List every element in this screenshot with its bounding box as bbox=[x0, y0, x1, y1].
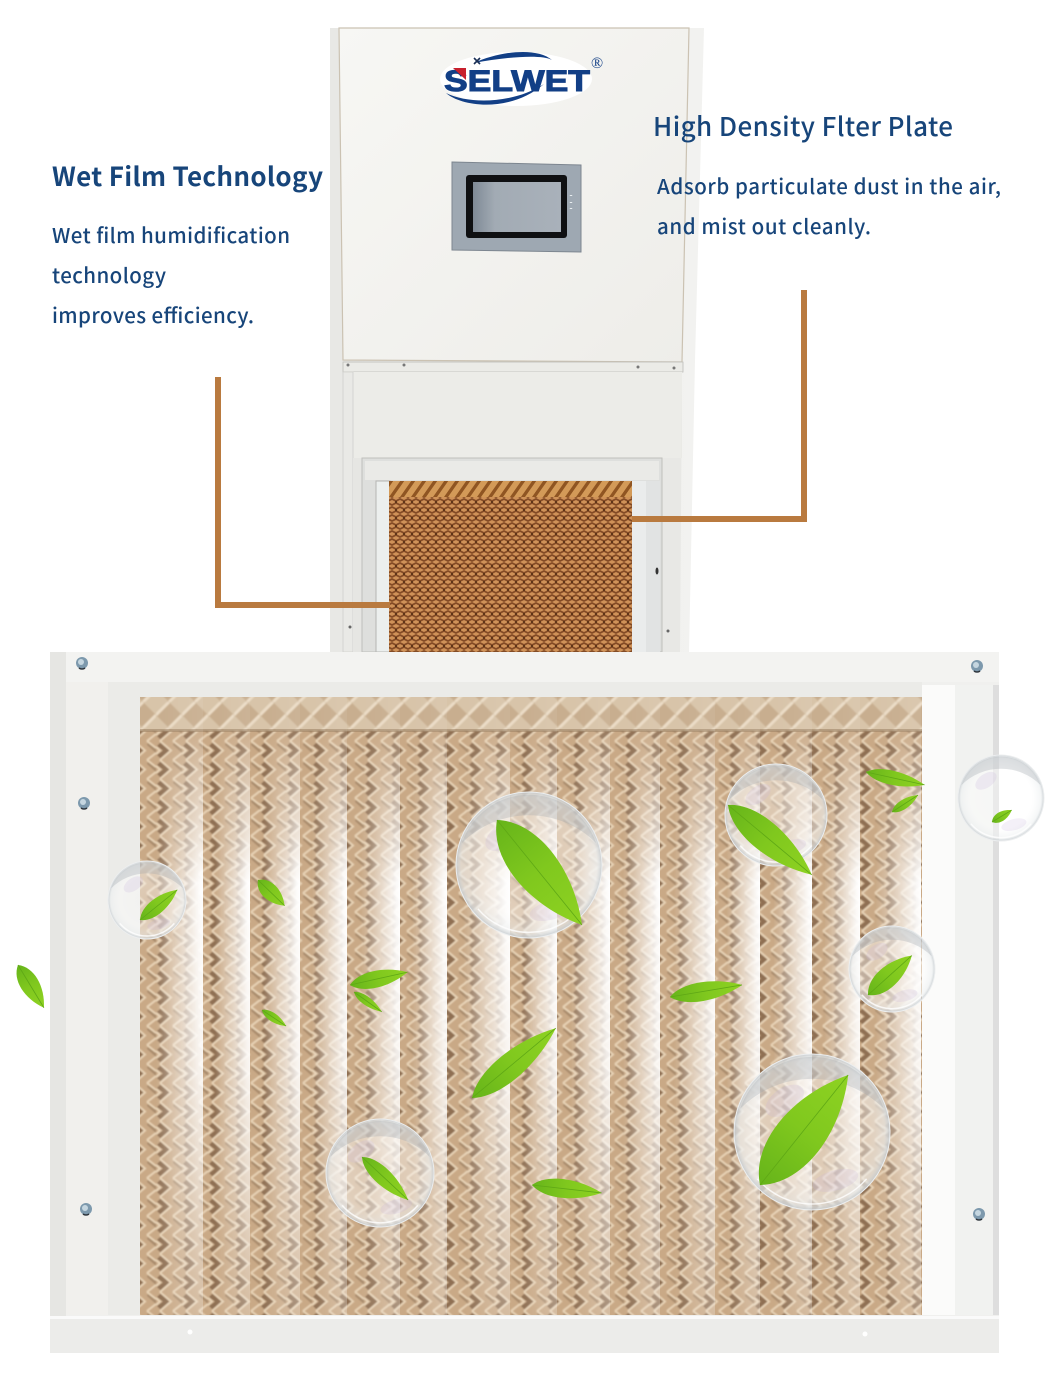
right side trim bbox=[662, 372, 682, 652]
leaf mid-left small bbox=[351, 988, 384, 1015]
bubble with leaf: centre large bbox=[456, 792, 602, 939]
wet film close-up panel bbox=[50, 652, 999, 1353]
screw right lower bbox=[973, 1208, 985, 1220]
display bbox=[473, 182, 561, 232]
bubble with leaf: lower right large bbox=[734, 1054, 890, 1210]
filter opening frame bbox=[348, 458, 670, 652]
left side trim bbox=[343, 372, 353, 652]
bezel bbox=[452, 162, 581, 252]
leader line left bbox=[218, 377, 390, 605]
description left bbox=[52, 219, 290, 329]
leaf small bbox=[252, 874, 290, 912]
bubble with leaf: upper right bbox=[718, 764, 827, 886]
metal frame bbox=[50, 652, 999, 1353]
description left: technology bbox=[52, 259, 166, 289]
description left: improves efficiency. bbox=[52, 299, 254, 329]
heading: high density filter plate bbox=[653, 107, 1001, 240]
cabinet body bbox=[330, 28, 704, 652]
wordmark: SELWET bbox=[444, 65, 590, 98]
leaf top right bbox=[864, 765, 926, 792]
leaf right centre bbox=[668, 976, 744, 1006]
logo: SELWET bbox=[440, 52, 603, 106]
description right: and mist out cleanly. bbox=[657, 210, 871, 240]
bubble with leaf: left bbox=[108, 861, 186, 939]
screw top left bbox=[76, 657, 88, 669]
bubble with leaf: lower left bbox=[326, 1119, 434, 1227]
corrugated pad bbox=[136, 693, 926, 1319]
leaf mid-left bbox=[348, 964, 409, 993]
upper swoosh bbox=[474, 52, 552, 63]
screw rail bbox=[343, 362, 683, 372]
heading: high density filter plate: High Density Flter Plate bbox=[653, 107, 953, 144]
bubble with leaf: far right bbox=[958, 755, 1044, 841]
lower cover panel bbox=[353, 372, 682, 458]
indicator dots bbox=[570, 195, 572, 209]
screw left lower bbox=[80, 1203, 92, 1215]
leaf lower centre bbox=[531, 1176, 603, 1202]
description right: Adsorb particulate dust in the air, bbox=[657, 170, 1001, 200]
bubble with leaf: right bbox=[849, 926, 935, 1012]
star mark bbox=[474, 58, 480, 64]
leader line right bbox=[632, 290, 804, 519]
screw left upper bbox=[78, 797, 90, 809]
black frame bbox=[466, 175, 567, 238]
light streaks bbox=[140, 697, 921, 1315]
lower swoosh bbox=[446, 84, 544, 105]
logo halo bbox=[440, 52, 592, 106]
leaf top right small bbox=[889, 791, 921, 816]
red accent bbox=[453, 68, 466, 80]
description right bbox=[657, 170, 1001, 240]
description left: Wet film humidification bbox=[52, 219, 290, 249]
leaf centre bbox=[464, 1018, 564, 1108]
screw top right bbox=[971, 660, 983, 672]
wet film pad on unit bbox=[389, 481, 632, 652]
air handling cabinet bbox=[330, 28, 704, 652]
leaf outside left bbox=[10, 960, 52, 1013]
heading: wet film technology: Wet Film Technology bbox=[52, 157, 323, 194]
leaf low-left small bbox=[260, 1006, 289, 1030]
upper front panel bbox=[339, 28, 689, 362]
registered mark: ® bbox=[591, 55, 603, 72]
heading: wet film technology bbox=[52, 157, 323, 329]
touch screen controller bbox=[452, 162, 581, 252]
